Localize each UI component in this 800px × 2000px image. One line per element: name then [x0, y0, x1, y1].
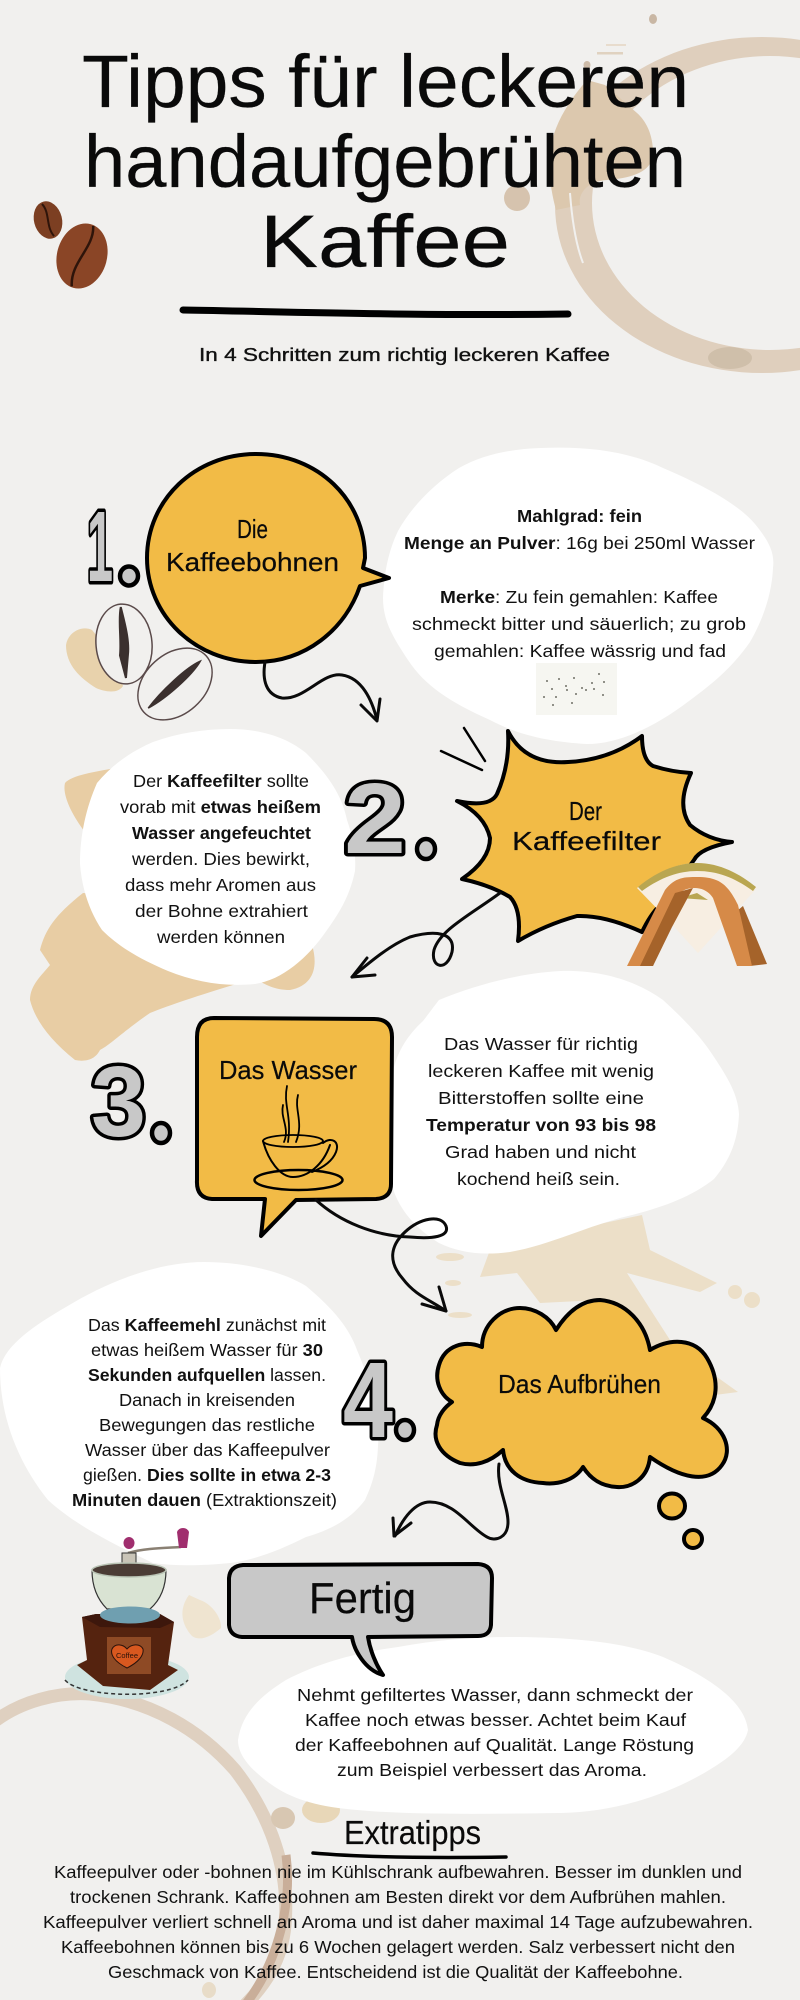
title: handaufgebrühten — [84, 120, 686, 203]
panel: step 2 heading starburst: Der — [569, 796, 602, 826]
panel: step 4 text bubble: Sekunden aufquellen lassen. — [88, 1365, 326, 1385]
panel: step 2 text bubble: werden können — [156, 927, 285, 947]
panel: step 3 text bubble — [389, 971, 739, 1254]
panel: step 4 text bubble: gießen. Dies sollte in etwa 2-3 — [83, 1465, 331, 1485]
panel: step 1 text bubble: Merke : Zu fein gemahlen: Kaffee — [440, 587, 718, 607]
panel: step 4 text bubble: Minuten dauen (Extraktionszeit) — [72, 1490, 337, 1510]
panel: finish text bubble: zum Beispiel verbessert das Aroma. — [337, 1760, 647, 1780]
icon: coffee grinder: Coffee — [116, 1653, 138, 1660]
panel: step 1 text bubble: schmeckt bitter und säuerlich; zu grob — [412, 614, 746, 634]
title underline — [183, 310, 568, 315]
panel: finish heading speech box: Fertig — [309, 1574, 416, 1623]
panel: step 3 text bubble: Bitterstoffen sollte eine — [438, 1088, 644, 1108]
extra tips text: Kaffeepulver oder -bohnen nie im Kühlschrank aufbewahren. Besser im dunklen und — [54, 1862, 742, 1882]
title: Tipps für leckeren — [82, 40, 689, 123]
panel: step 1 heading speech bubble — [147, 454, 389, 662]
panel: step 4 text bubble: Das Kaffeemehl zunächst mit — [88, 1315, 326, 1335]
panel: step 2 text bubble: der Bohne extrahiert — [135, 901, 308, 921]
coffee stain: right middle — [436, 1215, 760, 1395]
panel: step 3 text bubble: Temperatur von 93 bis 98 — [426, 1115, 656, 1135]
decorative burst lines — [441, 728, 485, 770]
panel: step 1 text bubble: gemahlen: Kaffee wässrig und fad — [434, 641, 726, 661]
panel: step 2 heading starburst — [457, 731, 732, 941]
panel: step 3 text bubble: kochend heiß sein. — [457, 1169, 620, 1189]
arrow: step 1 to 2 — [264, 662, 380, 721]
panel: step 1 heading speech bubble: Die — [237, 514, 268, 544]
panel: step 1 heading speech bubble: Kaffeebohnen — [166, 547, 339, 577]
panel: finish text bubble: der Kaffeebohnen auf Qualität. Lange Röstung — [295, 1735, 694, 1755]
panel: finish text bubble: Nehmt gefiltertes Wasser, dann schmeckt der — [297, 1685, 693, 1705]
panel: step 2 text bubble: Der Kaffeefilter sollte — [133, 771, 309, 791]
coffee stain: bottom ring — [0, 1595, 340, 2000]
coffee stain: top right ring — [504, 14, 800, 373]
icon: coffee beans — [30, 198, 115, 294]
icon: sketched coffee beans — [93, 602, 226, 734]
step number 4: 4 — [343, 1339, 393, 1460]
panel: step 3 text bubble: leckeren Kaffee mit wenig — [428, 1061, 654, 1081]
step number 1: 1 — [87, 491, 113, 603]
panel: step 4 heading thought cloud: Das Aufbrühen — [498, 1369, 661, 1399]
coffee stain: left middle — [30, 768, 315, 1061]
panel: step 4 text bubble: Danach in kreisenden — [119, 1390, 295, 1410]
arrow: step 2 to 3 — [352, 893, 500, 977]
panel: step 4 text bubble: Bewegungen das restliche — [99, 1415, 315, 1435]
panel: step 3 heading speech box: Das Wasser — [219, 1055, 357, 1085]
step number 2 — [344, 763, 435, 875]
panel: finish heading speech box — [229, 1564, 492, 1675]
panel: step 4 text bubble: Wasser über das Kaffeepulver — [85, 1440, 330, 1460]
panel: step 2 text bubble — [80, 729, 355, 985]
panel: step 3 text bubble: Grad haben und nicht — [445, 1142, 636, 1162]
panel: step 1 text bubble — [383, 448, 773, 744]
extra tips text: Kaffeepulver verliert schnell an Aroma und ist daher maximal 14 Tage aufzubewahren. — [43, 1912, 753, 1932]
panel: step 1 text bubble: Mahlgrad: fein — [517, 506, 642, 526]
panel: step 4 text bubble: etwas heißem Wasser für 30 — [91, 1340, 323, 1360]
arrow: step 3 to 4 — [316, 1200, 447, 1311]
panel: step 4 heading thought cloud — [436, 1300, 727, 1487]
extra tips text: trockenen Schrank. Kaffeebohnen am Besten direkt vor dem Aufbrühen mahlen. — [70, 1887, 726, 1907]
panel: step 2 text bubble: Wasser angefeuchtet — [132, 823, 311, 843]
panel: step 2 text bubble: vorab mit etwas heißem — [120, 797, 321, 817]
extra tips text: Kaffeebohnen können bis zu 6 Wochen gelagert werden. Salz verbessert nicht den — [61, 1937, 735, 1957]
extra tips heading: Extratipps — [344, 1814, 481, 1851]
icon: coffee grinder — [65, 1528, 189, 1699]
panel: step 2 text bubble: dass mehr Aromen aus — [125, 875, 316, 895]
panel: finish text bubble: Kaffee noch etwas besser. Achtet beim Kauf — [305, 1710, 686, 1730]
panel: step 3 heading speech box — [197, 1018, 392, 1236]
panel: step 3 text bubble: Das Wasser für richtig — [444, 1034, 638, 1054]
icon: coffee filter holder — [627, 863, 767, 966]
panel: finish text bubble — [238, 1637, 748, 1814]
subtitle: In 4 Schritten zum richtig leckeren Kaffee — [199, 345, 610, 365]
title: Kaffee — [260, 200, 510, 283]
panel: step 4 text bubble — [0, 1262, 378, 1565]
panel: step 2 heading starburst: Kaffeefilter — [512, 826, 661, 856]
extra tips text — [43, 1862, 753, 1982]
arrow: step 4 to finish — [393, 1464, 508, 1539]
step number 3: 3 — [91, 1046, 146, 1158]
step number 2: 2 — [344, 763, 406, 875]
thought bubble dots — [659, 1494, 702, 1548]
extra tips underline — [313, 1853, 506, 1858]
coffee stain behind sketched beans — [66, 628, 123, 692]
icon: steaming coffee cup — [254, 1086, 342, 1190]
panel: step 2 text bubble: werden. Dies bewirkt, — [131, 849, 310, 869]
title — [82, 40, 689, 283]
panel: step 1 text bubble: Menge an Pulver : 16g bei 250ml Wasser — [404, 533, 755, 553]
extra tips text: Geschmack von Kaffee. Entscheidend ist die Qualität der Kaffeebohne. — [108, 1962, 683, 1982]
icon: ground coffee sample — [536, 663, 617, 715]
